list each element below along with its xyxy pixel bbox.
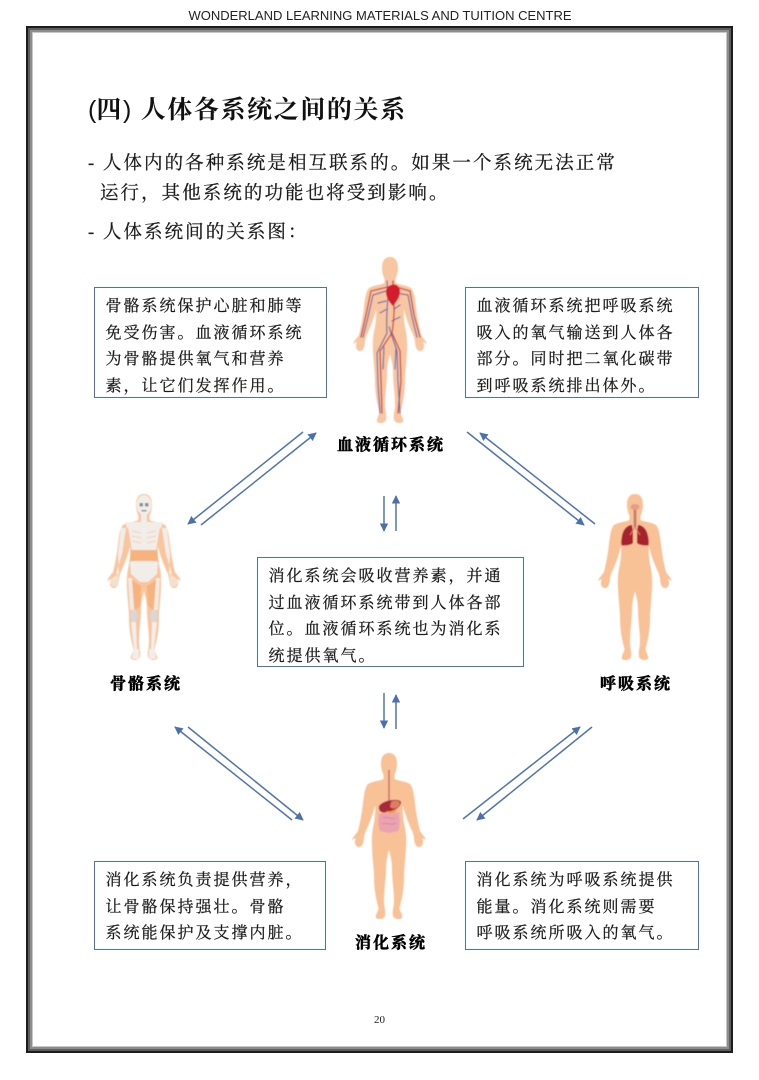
- callout: circulatory and respiratory: 到呼吸系统排出体外。: [476, 378, 657, 395]
- arrows: respiratory and digestive: [463, 727, 592, 820]
- callout: digestive and skeletal: 系统能保护及支撑内脏。: [106, 925, 304, 942]
- arrows: circulatory and respiratory: [467, 432, 595, 525]
- callout: circulatory and respiratory: 部分。同时把二氧化碳带: [476, 351, 675, 368]
- callout: circulatory and respiratory: 血液循环系统把呼吸系统: [476, 298, 675, 315]
- callout: digestive and respiratory: 能量。消化系统则需要: [476, 899, 657, 916]
- callout: digestive and circulatory: 统提供氧气。: [268, 648, 377, 665]
- callout: skeletal and circulatory: 为骨骼提供氧气和营养: [106, 351, 286, 368]
- figure: circulatory system: [353, 257, 427, 423]
- label: digestive system: 消化系统: [355, 935, 427, 952]
- label: respiratory system: 呼吸系统: [600, 676, 672, 693]
- callout: digestive and respiratory: 呼吸系统所吸入的氧气。: [476, 925, 675, 942]
- callout: skeletal and circulatory: 免受伤害。血液循环系统: [106, 325, 304, 342]
- figure: respiratory system: [598, 494, 672, 660]
- intro text: systems are connected: - 人体内的各种系统是相互联系的。如果一个系统无法正常: [88, 154, 617, 174]
- figure: digestive system: [352, 753, 426, 919]
- callout: digestive and circulatory: 消化系统会吸收营养素，并通: [268, 568, 503, 585]
- callout: digestive and skeletal: [94, 861, 326, 950]
- label: skeletal system: 骨骼系统: [110, 676, 182, 693]
- intro text: systems are connected: [88, 152, 617, 204]
- intro text: relationship diagram: - 人体系统间的关系图：: [88, 223, 309, 243]
- arrows: skeletal and digestive: [175, 727, 303, 820]
- callout: digestive and circulatory: [257, 557, 524, 667]
- callout: skeletal and circulatory: [94, 287, 327, 398]
- callout: digestive and skeletal: 让骨骼保持强壮。骨骼: [106, 899, 286, 916]
- intro text: systems are connected: 运行，其他系统的功能也将受到影响。: [100, 184, 450, 204]
- figure: skeletal system: [107, 494, 181, 660]
- title: (四) 人体各系统之间的关系: [88, 96, 407, 124]
- callout: digestive and respiratory: 消化系统为呼吸系统提供: [476, 872, 675, 889]
- label: circulatory system: 血液循环系统: [337, 437, 445, 454]
- arrows: circulatory and digestive upper: [384, 496, 396, 531]
- callout: digestive and circulatory: 位。血液循环系统也为消化系: [268, 621, 503, 638]
- arrows: circulatory and digestive lower: [384, 693, 396, 729]
- header text: WONDERLAND LEARNING MATERIALS AND TUITION CENTRE: [188, 8, 572, 23]
- callout: digestive and skeletal: 消化系统负责提供营养，: [106, 872, 304, 889]
- page number: 20: [374, 1014, 385, 1026]
- callout: digestive and respiratory: [465, 861, 699, 950]
- callout: circulatory and respiratory: [465, 287, 699, 398]
- callout: skeletal and circulatory: 素，让它们发挥作用。: [106, 378, 286, 395]
- callout: circulatory and respiratory: 吸入的氧气输送到人体各: [476, 325, 675, 342]
- callout: digestive and circulatory: 过血液循环系统带到人体各部: [268, 595, 503, 612]
- callout: skeletal and circulatory: 骨骼系统保护心脏和肺等: [106, 298, 304, 315]
- arrows: circulatory and skeletal: [188, 432, 316, 525]
